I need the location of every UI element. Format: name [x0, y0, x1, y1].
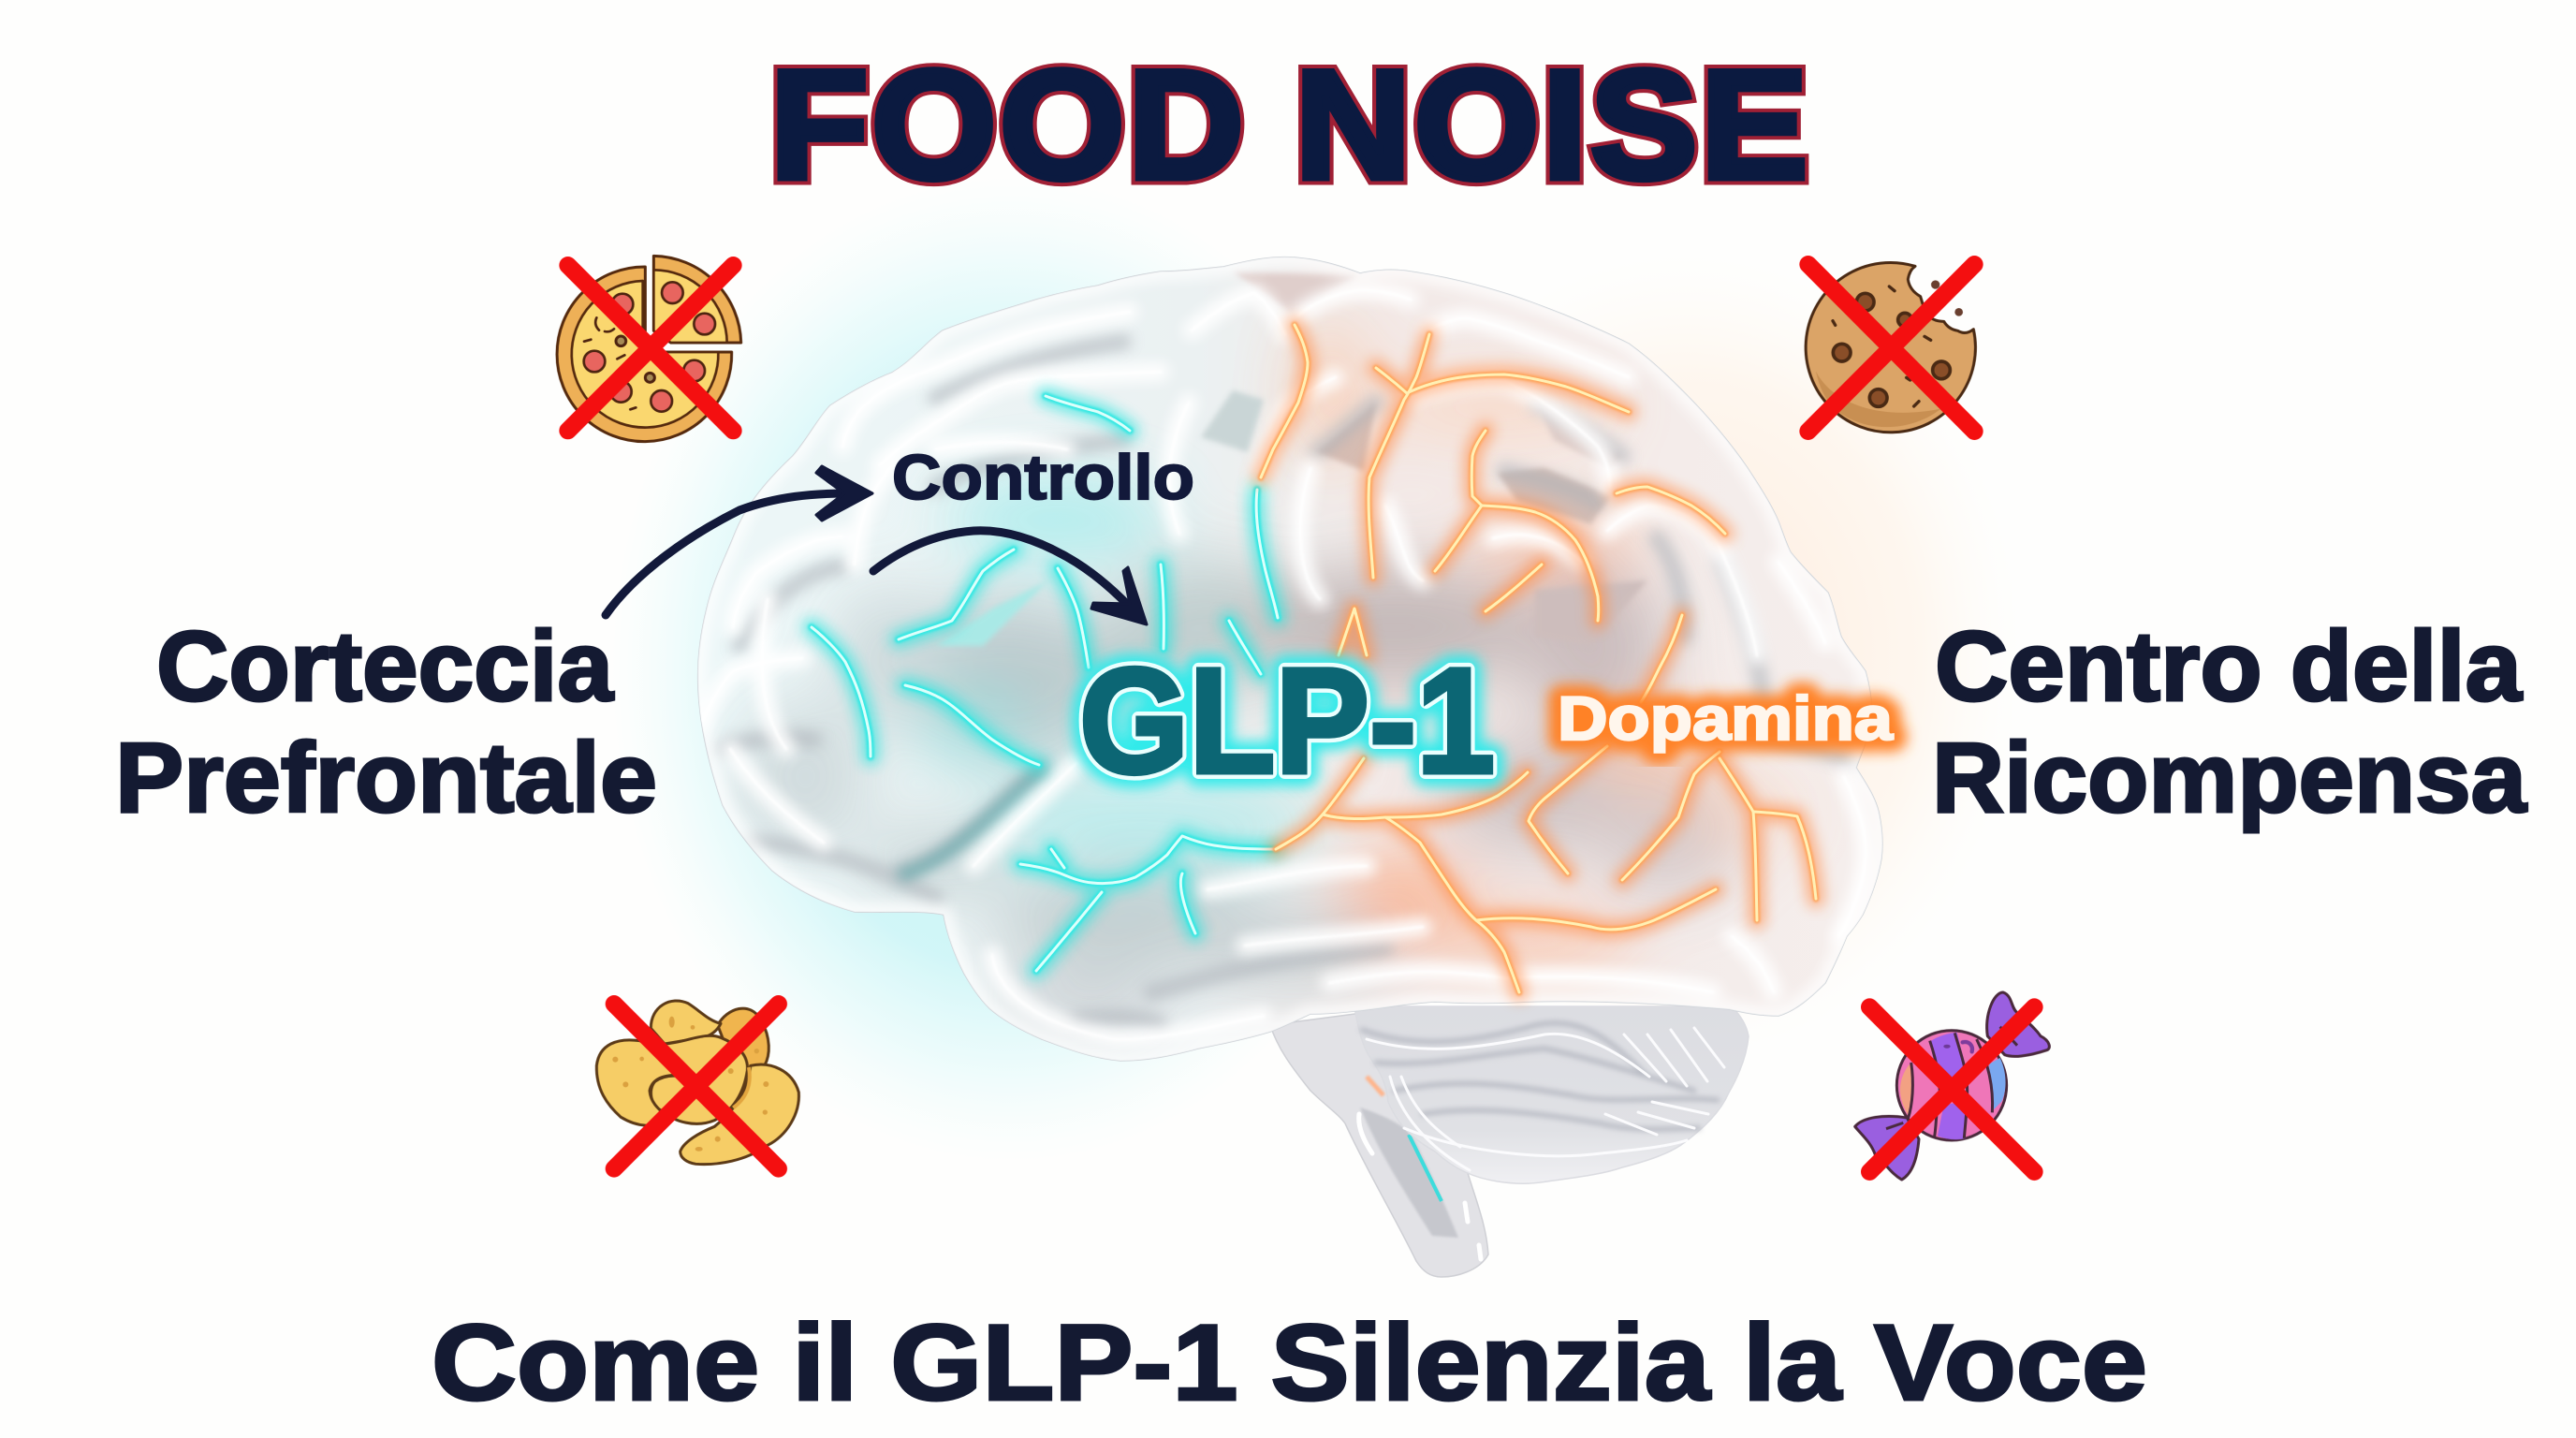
- cerebrum body: [698, 257, 1882, 1061]
- label: GLP-1: GLP-1: [1079, 637, 1495, 804]
- arrow: prefrontal cortex to Controllo: [606, 466, 872, 615]
- icon: crossed-out pizza: [557, 256, 741, 442]
- brain glow: [608, 173, 2022, 1166]
- label: Centro della Ricompensa: Centro della: [1935, 611, 2523, 722]
- icon: crossed-out cookie: [1806, 262, 1975, 433]
- arrow: Controllo to GLP-1: [873, 531, 1147, 624]
- label: Centro della Ricompensa: Ricompensa: [1932, 723, 2527, 833]
- illustration: brain: [698, 257, 1882, 1277]
- label: GLP-1: GLP-1: [1079, 637, 1495, 804]
- icon: crossed-out potato chips: [596, 1001, 798, 1168]
- orange pathways: [1261, 325, 1816, 992]
- icon: crossed-out candy: [1855, 992, 2049, 1180]
- subtitle: Come il GLP-1 Silenzia la Voce: [432, 1303, 2147, 1423]
- label: Corteccia Prefrontale: [115, 611, 657, 833]
- cortical folds and shading: [698, 257, 1882, 1061]
- title: FOOD NOISE: [770, 38, 1808, 211]
- title: FOOD NOISE: [770, 38, 1808, 211]
- cyan pathways: [812, 396, 1278, 971]
- label: Controllo: Controllo: [892, 442, 1194, 513]
- shaded facets: [936, 271, 1647, 646]
- label: Corteccia Prefrontale: Prefrontale: [115, 723, 657, 833]
- label: GLP-1: GLP-1: [1079, 637, 1495, 804]
- label: Dopamina: Dopamina: [1558, 683, 1894, 753]
- sylvian shadow: [899, 768, 1044, 875]
- label: Corteccia Prefrontale: Corteccia: [156, 611, 614, 722]
- label: Centro della Ricompensa: [1932, 611, 2527, 833]
- label: Dopamina: Dopamina: [1558, 683, 1894, 753]
- brain stem: [1270, 1011, 1488, 1277]
- cerebellum: [1354, 1006, 1749, 1183]
